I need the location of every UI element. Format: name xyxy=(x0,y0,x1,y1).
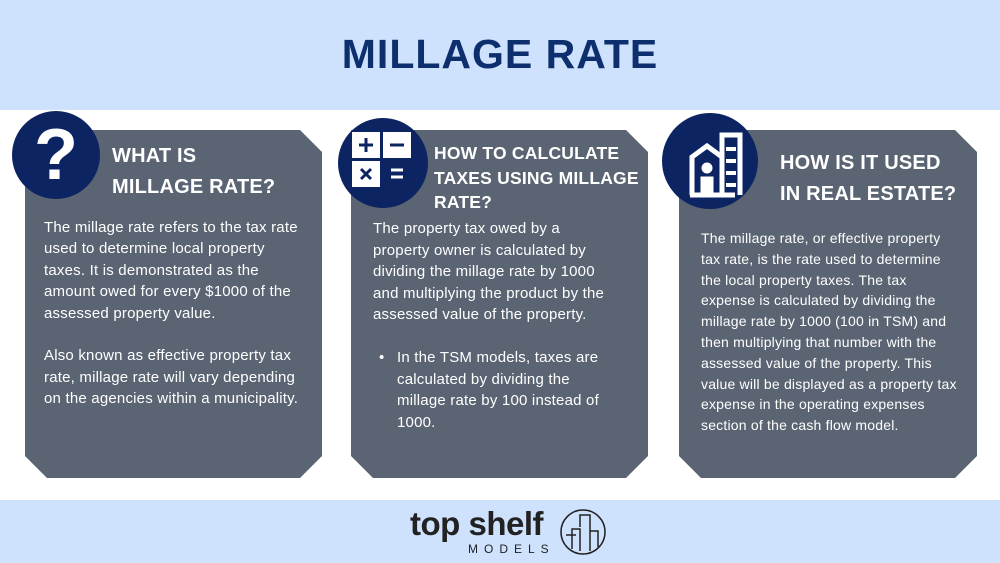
icon: question mark xyxy=(12,111,100,199)
text: what is: amount owed for every $1000 of the xyxy=(44,283,291,300)
heading: what is: WHAT IS xyxy=(112,145,196,167)
logo xyxy=(410,505,606,556)
text: real estate xyxy=(701,230,957,433)
text: real estate: The millage rate, or effective property xyxy=(701,230,940,246)
text: what is: used to determine local property xyxy=(44,240,265,257)
text: real estate: the local property taxes. The tax xyxy=(701,272,907,288)
text: real estate: expense in the operating expenses xyxy=(701,396,925,412)
heading: real estate: HOW IS IT USED xyxy=(780,152,941,174)
heading: real estate: IN REAL ESTATE? xyxy=(780,183,956,205)
text: what is: Also known as effective property tax xyxy=(44,347,291,364)
panel: what is xyxy=(25,130,322,478)
text: what is: taxes. It is demonstrated as the xyxy=(44,262,259,279)
footer band xyxy=(0,500,1000,563)
icon: calculator xyxy=(338,118,428,208)
text: how to calculate: property owner is calculated by xyxy=(373,242,586,259)
heading: how to calculate: TAXES USING MILLAGE xyxy=(434,168,639,188)
text: real estate: assessed value of the property. This xyxy=(701,355,932,371)
text: how to calculate: 1000. xyxy=(397,414,436,431)
text: what is: The millage rate refers to the tax rate xyxy=(44,219,298,236)
text: real estate: expense is calculated by dividing the xyxy=(701,292,936,308)
logo: MODELS xyxy=(468,542,555,556)
text: what is: assessed property value. xyxy=(44,305,216,322)
header band xyxy=(0,0,1000,110)
heading: how to calculate xyxy=(434,143,639,212)
text: what is xyxy=(44,219,298,407)
text: real estate: then multiplying that number with the xyxy=(701,334,936,350)
title: MILLAGE RATE xyxy=(342,31,658,77)
text: how to calculate: millage rate by 100 instead of xyxy=(397,392,599,409)
text: how to calculate: assessed value of the property. xyxy=(373,306,587,323)
heading: how to calculate: HOW TO CALCULATE xyxy=(434,143,619,163)
heading: real estate xyxy=(780,152,956,205)
logo: top shelf xyxy=(410,505,543,542)
icon: question mark: ? xyxy=(34,115,78,195)
text: real estate: value will be displayed as a property tax xyxy=(701,376,957,392)
text: how to calculate: In the TSM models, taxes are xyxy=(397,349,598,366)
text: how to calculate: dividing the millage rate by 1000 xyxy=(373,263,595,280)
heading: how to calculate: RATE? xyxy=(434,192,492,212)
text: how to calculate: • xyxy=(379,349,384,366)
text: how to calculate xyxy=(373,220,604,431)
text: what is: on the agencies within a municipality. xyxy=(44,390,298,407)
text: how to calculate: and multiplying the product by the xyxy=(373,285,604,302)
icon: buildings xyxy=(662,113,758,209)
heading: what is xyxy=(112,145,275,198)
text: real estate: section of the cash flow model. xyxy=(701,417,899,433)
text: real estate: tax rate, is the rate used to determine xyxy=(701,251,941,267)
panel: real estate xyxy=(679,130,977,478)
text: how to calculate: calculated by dividing the xyxy=(397,371,570,388)
text: what is: rate, millage rate will vary depending xyxy=(44,369,295,386)
panel: how to calculate xyxy=(351,130,648,478)
text: how to calculate: The property tax owed by a xyxy=(373,220,560,237)
heading: what is: MILLAGE RATE? xyxy=(112,176,275,198)
text: real estate: millage rate by 1000 (100 in TSM) and xyxy=(701,313,946,329)
